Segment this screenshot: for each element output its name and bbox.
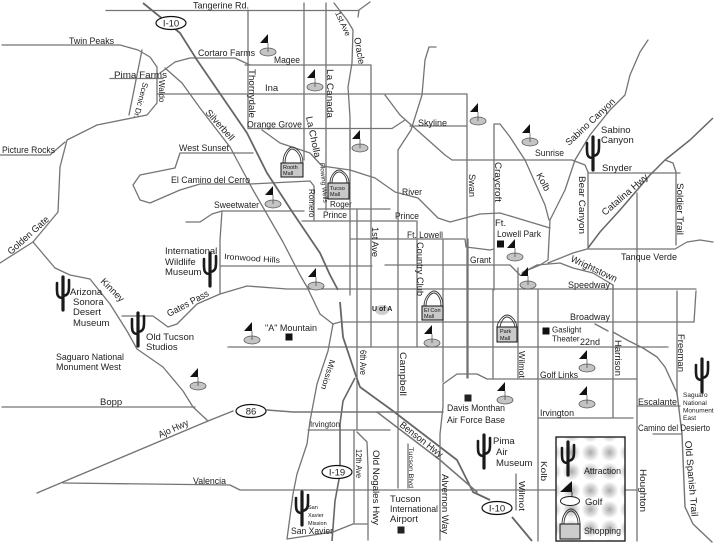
highway shield: I-19 [322, 466, 352, 478]
label: Tanque Verde: Tanque Verde [621, 252, 677, 263]
highway shield: I-10 north [156, 16, 186, 30]
roads: north-south grid, north side [248, 3, 398, 488]
label: Prince east: Prince [395, 211, 419, 222]
roads: Prince, Ft Lowell, Grant [221, 209, 520, 347]
label: Ft Lowell: Ft. Lowell [407, 230, 443, 241]
label: Gaslight Theater [552, 326, 582, 344]
label: Thornydale: Thornydale [246, 69, 257, 118]
label: Sabino Canyon attraction: Canyon [601, 135, 634, 146]
label: Ft Lowell Park: Lowell Park [497, 229, 541, 240]
roads: central north-south [357, 193, 696, 541]
golf: West [190, 368, 206, 390]
label: Ft Lowell Park [495, 218, 541, 240]
label: A Mountain: "A" Mountain [265, 323, 317, 334]
label: Soldier Trail: Soldier Trail [674, 183, 685, 235]
cactus: Saguaro East [696, 359, 708, 392]
label: Pima Air Museum [493, 436, 533, 469]
label: Romero: Romero [307, 189, 316, 218]
label: Saguaro National Monument East [683, 392, 714, 422]
legend background [556, 437, 625, 541]
label: Harrison: Harrison [612, 340, 623, 376]
cactus: Old Tucson [132, 313, 144, 346]
label: Tucson Blvd: Tucson Blvd [407, 447, 414, 488]
label: Houghton: Houghton [637, 469, 648, 512]
highway shield: I-10 south [482, 502, 512, 514]
road: Kolb and Craycroft [494, 124, 549, 290]
label: Bopp: Bopp [100, 397, 122, 408]
label: El Camino del Cerro: El Camino del Cerro [171, 175, 250, 186]
roads: east-west north side [157, 65, 467, 378]
roads: Golf Links and Irvington [308, 374, 637, 430]
label: Pima Air Museum: Pima [493, 436, 515, 447]
label: Scenic Dr: Scenic Dr. [132, 81, 150, 119]
label: Wilmot north: Wilmot [517, 351, 526, 379]
label: River: River [402, 187, 422, 198]
label: Pima Air Museum: Museum [496, 458, 533, 469]
road: I-19 [332, 378, 355, 541]
icon: Tucson Mall [328, 170, 349, 199]
icon: El Con Mall: El Con [424, 308, 441, 314]
label: Sunrise: Sunrise [535, 148, 564, 159]
roads: Speedway, Broadway, 22nd [228, 289, 696, 347]
label: Bear Canyon: Bear Canyon [576, 176, 587, 234]
road: I-10 [143, 3, 532, 541]
icon: Rooth Mall: Rooth [283, 165, 298, 171]
label: Davis Monthan Air Force Base: Davis Monthan [447, 403, 505, 414]
cactus: San Xavier [296, 492, 308, 525]
label: Sabino Canyon attraction [601, 125, 634, 146]
label: Davis Monthan Air Force Base [447, 403, 505, 426]
icon: Tucson Mall: Tucso [330, 186, 345, 192]
label: Prince west: Prince [323, 210, 347, 221]
road: Soldier Trail [665, 160, 676, 245]
road: Catalina Hwy [588, 118, 713, 248]
label: Davis Monthan Air Force Base: Air Force Base [447, 415, 505, 426]
label: Tucson International Airport [390, 494, 438, 525]
label: Arizona Sonora Desert Museum [70, 287, 110, 329]
label: Old Nogales Hwy: Old Nogales Hwy [370, 450, 381, 525]
icon: A Mountain marker [286, 334, 292, 340]
legend: Shopping: Shopping [584, 526, 621, 537]
icon: Ft Lowell Park marker [497, 240, 504, 248]
road: Tanque Verde [548, 240, 713, 263]
label: Alvernon Way: Alvernon Way [439, 474, 450, 534]
label: Picture Rocks: Picture Rocks [2, 145, 55, 156]
label: Magee: Magee [274, 55, 300, 66]
roads: Escalante and Camino del Desierto [637, 406, 682, 434]
road: Gates Pass [122, 286, 337, 327]
highway shield: I-19: I-19 [329, 468, 345, 478]
icon: Tucson Mall: Mall [330, 192, 340, 198]
label: Freeman: Freeman [675, 334, 686, 372]
label: Broadway: Broadway [570, 312, 610, 323]
label: Benson Hwy: Benson Hwy [397, 420, 445, 461]
golf: Irvington [579, 386, 595, 408]
cactus: Sabino [587, 137, 599, 170]
road: Bopp [2, 406, 195, 408]
label: Sabino Canyon road: Sabino Canyon [564, 97, 618, 148]
highway shield: 86 [236, 404, 266, 418]
golf: Skyline [470, 103, 486, 125]
label: Cortaro Farms: Cortaro Farms [198, 48, 255, 59]
golf: A Mountain [244, 322, 260, 344]
label: Valencia: Valencia [193, 476, 227, 487]
legend: Golf: Golf [585, 497, 603, 508]
label: West Sunset: West Sunset [179, 143, 229, 154]
label: Tangerine Rd: Tangerine Rd. [193, 0, 249, 12]
icon: Davis Monthan marker [464, 394, 472, 402]
label: Swan: Swan [466, 174, 477, 197]
road: West Sunset and El Camino del Cerro [133, 153, 314, 220]
golf: 22nd [424, 325, 440, 347]
road: Skyline curve and Sunrise [385, 95, 588, 172]
golf: Cortaro [260, 34, 276, 56]
cactus: Desert Museum [57, 277, 69, 310]
label: Saguaro National Monument East: National [683, 400, 707, 407]
road: Tangerine Rd [106, 2, 370, 17]
golf: Speedway [520, 267, 536, 289]
icon: El Con Mall: Mall [424, 314, 434, 320]
label: 1st Ave: 1st Ave [369, 227, 380, 257]
U of A blotch [375, 305, 389, 315]
icons: attractions cacti [57, 137, 708, 525]
label: Arizona Sonora Desert Museum: Arizona [70, 287, 103, 298]
label: Saguaro National Monument West: Saguaro National [56, 352, 124, 363]
legend: flag icon [560, 481, 580, 506]
label: Golf Links: Golf Links [540, 370, 578, 381]
road: Benson Hwy [377, 412, 477, 492]
label: Wilmot south: Wilmot [517, 481, 526, 512]
icon: El Con Mall [422, 291, 443, 320]
label: Old Tucson Studios: Studios [146, 342, 178, 353]
label: Grant: Grant [470, 255, 491, 266]
label: Old Tucson Studios [146, 332, 194, 353]
label: Ina: Ina [265, 83, 279, 94]
label: San Xavier Mission: Xavier [308, 513, 324, 519]
label: International Wildlife Museum: Museum [165, 267, 202, 278]
road: Twin Peaks and Golden Gate [0, 45, 157, 263]
road: Alvernon Way [440, 384, 443, 540]
label: Kinney: Kinney [98, 276, 126, 305]
cactus: International Wildlife Museum [204, 253, 216, 286]
label: Irvington west: Irvington [310, 420, 340, 429]
label: San Xavier: San Xavier [291, 526, 333, 537]
label: Kolb south: Kolb [539, 461, 548, 482]
label: Sweetwater: Sweetwater [214, 200, 259, 211]
highway shield: I-10 south: I-10 [489, 504, 505, 514]
label: Arizona Sonora Desert Museum: Museum [73, 318, 110, 329]
label: Mission: Mission [319, 358, 337, 391]
label: Saguaro National Monument East: Saguaro [683, 392, 708, 399]
road: Oracle and 1st Ave [334, 3, 353, 150]
label: Saguaro National Monument East: Monument [683, 408, 714, 414]
label: La Canada: La Canada [324, 69, 335, 119]
label: Ajo Hwy: Ajo Hwy [157, 418, 191, 441]
label: Campbell: Campbell [397, 352, 408, 396]
label: Saguaro National Monument East: East [683, 415, 696, 422]
label: Wrightstown: Wrightstown [569, 254, 619, 285]
label: 6th Ave: 6th Ave [357, 350, 368, 375]
road: Wilmot south [515, 474, 517, 510]
road: Sweetwater [186, 211, 304, 294]
road: River [262, 130, 550, 228]
golf: Sweetwater [265, 186, 281, 208]
icons: golf courses [190, 34, 595, 408]
icon: Park Mall [497, 315, 517, 342]
icon: Rooth Mall: Mall [283, 171, 293, 177]
label: Ft Lowell Park: Ft. [495, 218, 506, 229]
label: San Xavier Mission [308, 505, 327, 527]
golf: Golf Links [579, 350, 595, 372]
label: Skyline: Skyline [418, 118, 447, 129]
label: Sabino Canyon attraction: Sabino [601, 125, 631, 136]
label: Arizona Sonora Desert Museum: Desert [73, 307, 101, 318]
label: Gaslight Theater: Gaslight [552, 326, 582, 334]
label: Flowing Wells: Flowing Wells [318, 163, 329, 204]
label: 1st Ave north: 1st Ave [333, 10, 353, 38]
highway shield: 86: 86 [246, 406, 256, 418]
label: Gaslight Theater: Theater [552, 334, 580, 344]
golf: Ina [307, 69, 323, 91]
road: Picture Rocks [0, 142, 65, 155]
label: San Xavier Mission: Mission [308, 521, 327, 527]
label: Golden Gate: Golden Gate [6, 214, 52, 257]
roads: Old Nogales, 12th Ave, Tucson Blvd [354, 430, 408, 540]
label: Pima Air Museum: Air [496, 447, 508, 458]
legend: cactus icon [562, 442, 574, 475]
road: Ajo Hwy and 86 [37, 410, 443, 493]
icon: Airport marker [398, 526, 404, 534]
road: Pima Farms [110, 78, 163, 80]
legend [556, 437, 625, 541]
label: Catalina Hwy: Catalina Hwy [600, 172, 651, 218]
label: International Wildlife Museum: International [165, 246, 217, 257]
label: Silverbell: Silverbell [203, 108, 236, 143]
label: Speedway: Speedway [568, 280, 610, 291]
label: Kolb north: Kolb [533, 171, 552, 193]
label: Waldo: Waldo [157, 80, 166, 103]
label: Old Spanish Trail: Old Spanish Trail [682, 440, 700, 517]
golf: Sunrise [522, 124, 538, 146]
road: Scenic Dr [129, 50, 142, 115]
legend: Attraction: Attraction [584, 466, 621, 477]
label: San Xavier Mission: San [308, 505, 318, 511]
label: La Cholla: La Cholla [303, 115, 323, 159]
label: 22nd: 22nd [580, 337, 600, 348]
road: Kinney [33, 242, 208, 421]
road: Valencia [63, 483, 637, 490]
label: Irvington east: Irvington [540, 408, 574, 419]
label: Snyder: Snyder [602, 163, 632, 174]
label: Rogers: Roger [330, 200, 352, 209]
label: 12th Ave: 12th Ave [354, 449, 363, 479]
icon: Rooth Mall [281, 147, 303, 177]
road: Sabino Canyon [523, 40, 648, 272]
golf: Ft Lowell [507, 239, 523, 261]
label: Old Tucson Studios: Old Tucson [146, 332, 194, 343]
label: Tucson International Airport: Tucson [390, 494, 421, 505]
road: Campbell north [398, 47, 436, 150]
label: International Wildlife Museum [165, 246, 217, 278]
label: Arizona Sonora Desert Museum: Sonora [73, 297, 104, 308]
golf: Oracle [352, 130, 368, 152]
label: Saguaro National Monument West: Monument West [56, 362, 121, 373]
label: Gates Pass: Gates Pass [165, 288, 211, 320]
golf: Davis Monthan [497, 382, 513, 404]
label: U of A: U of A [372, 306, 392, 313]
label: International Wildlife Museum: Wildlife [165, 257, 196, 268]
icon: Gaslight Theater marker [542, 328, 550, 334]
road: Wrightstown [522, 263, 613, 290]
label: Tucson International Airport: Airport [390, 514, 418, 525]
cactus: Pima Air [478, 435, 490, 468]
label: Ironwood Hills: Ironwood Hills [224, 252, 280, 265]
road: Aviation and Old Spanish Trail [595, 324, 712, 542]
label: Tucson International Airport: International [390, 504, 438, 515]
label: Twin Peaks: Twin Peaks [69, 36, 114, 47]
icon: Park Mall: Mall [500, 336, 510, 342]
golf: Silverbell [308, 268, 324, 290]
label: Escalante: Escalante [638, 397, 677, 408]
label: Oracle: Oracle [351, 37, 367, 65]
label: Orange Grove: Orange Grove [247, 120, 302, 130]
roads: Bear Canyon and Snyder [588, 172, 680, 248]
label: Craycroft: Craycroft [492, 162, 503, 202]
legend: bag icon [560, 509, 580, 539]
label: Saguaro National Monument West [56, 352, 124, 373]
road: Silverbell and Mission [165, 68, 367, 539]
highway shield: I-10 north: I-10 [163, 18, 179, 30]
label: Country Club: Country Club [414, 242, 425, 296]
icon: Park Mall: Park [500, 329, 512, 335]
label: Pima Farms: Pima Farms [114, 70, 167, 81]
road: Cortaro Farms [160, 58, 250, 73]
